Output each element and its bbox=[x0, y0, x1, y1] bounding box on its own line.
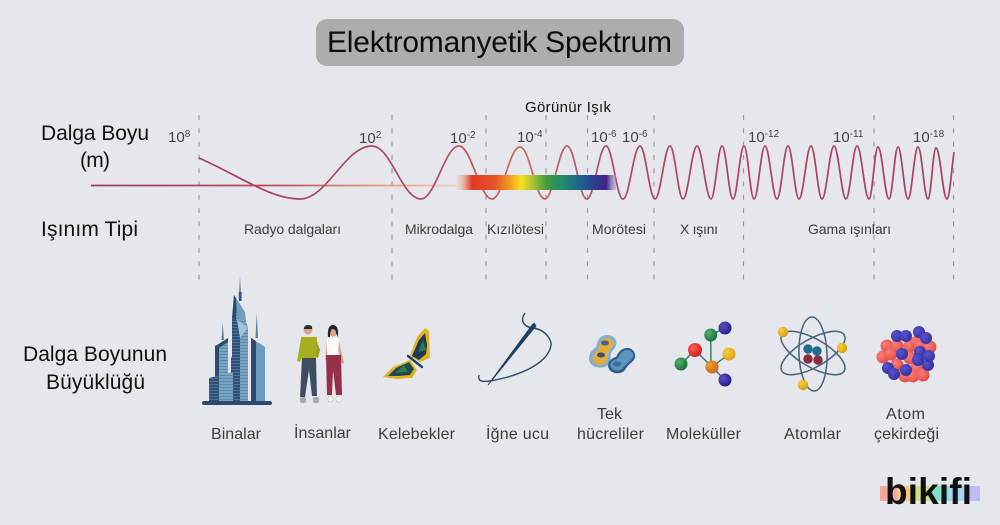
wavelength scale labels: -4 bbox=[534, 129, 543, 140]
size category labels: İğne ucu bbox=[486, 424, 549, 443]
wavelength scale labels: 10 bbox=[359, 130, 376, 147]
wavelength scale labels: 2 bbox=[376, 130, 382, 141]
wavelength scale labels: 10 bbox=[748, 129, 765, 146]
icon: people bbox=[297, 325, 344, 403]
title bbox=[316, 19, 684, 66]
wavelength scale labels bbox=[168, 129, 945, 147]
radiation type labels bbox=[244, 221, 891, 237]
logo: bikifi: bikifi bbox=[885, 471, 972, 512]
wavelength scale labels: 10 bbox=[833, 129, 850, 146]
heading: Dalga Boyunun Büyüklüğü: Büyüklüğü bbox=[46, 371, 145, 394]
wavelength scale labels: -2 bbox=[467, 130, 476, 141]
wavelength scale labels: -11 bbox=[850, 129, 864, 140]
size category labels bbox=[211, 406, 939, 443]
axis line bbox=[91, 184, 456, 186]
visible spectrum band bbox=[456, 175, 616, 190]
wavelength scale labels: 10 bbox=[517, 129, 534, 146]
radiation type labels: Morötesi bbox=[592, 221, 646, 237]
radiation type labels: Kızılötesi bbox=[487, 221, 544, 237]
radiation type labels: X ışını bbox=[680, 221, 718, 237]
icon: atom bbox=[775, 317, 851, 391]
wavelength scale labels: 10 bbox=[591, 129, 608, 146]
wavelength scale labels: 10 bbox=[450, 130, 467, 147]
wavelength scale labels: 8 bbox=[185, 129, 191, 140]
wavelength scale labels: -6 bbox=[608, 129, 617, 140]
wavelength scale labels: -6 bbox=[639, 129, 648, 140]
size category labels: çekirdeği bbox=[874, 426, 939, 443]
heading: Dalga Boyu (m): (m) bbox=[80, 149, 110, 172]
heading: Işınım Tipi: Işınım Tipi bbox=[41, 218, 138, 241]
size category labels: Atom bbox=[886, 406, 925, 423]
radiation type labels: Mikrodalga bbox=[405, 221, 473, 237]
heading: Dalga Boyu (m) bbox=[41, 122, 149, 172]
icon: single-cell organisms bbox=[589, 335, 635, 373]
title: Elektromanyetik Spektrum bbox=[327, 26, 672, 59]
icon: atomic nucleus bbox=[876, 326, 936, 382]
heading: Dalga Boyunun Büyüklüğü bbox=[23, 343, 167, 394]
heading: Dalga Boyunun Büyüklüğü: Dalga Boyunun bbox=[23, 343, 167, 366]
size category labels: Atomlar bbox=[784, 426, 842, 443]
visible light label: Görünür Işık bbox=[525, 99, 612, 116]
icon: needle and thread bbox=[479, 313, 551, 385]
wavelength scale labels: -12 bbox=[765, 129, 780, 140]
icon: butterfly bbox=[383, 328, 430, 379]
wavelength scale labels: 10 bbox=[622, 129, 639, 146]
electromagnetic wave bbox=[199, 146, 954, 199]
size category labels: hücreliler bbox=[577, 426, 645, 443]
wavelength scale labels: 10 bbox=[168, 129, 185, 146]
size category labels: İnsanlar bbox=[294, 423, 352, 442]
wavelength scale labels: -18 bbox=[930, 129, 945, 140]
size category labels: Moleküller bbox=[666, 426, 742, 443]
radiation type labels: Radyo dalgaları bbox=[244, 221, 341, 237]
size category labels: Tek bbox=[597, 406, 623, 423]
wavelength scale labels: 10 bbox=[913, 129, 930, 146]
size category labels: Binalar bbox=[211, 426, 262, 443]
icon: buildings bbox=[202, 276, 272, 405]
size category labels: Kelebekler bbox=[378, 426, 456, 443]
radiation type labels: Gama ışınları bbox=[808, 221, 891, 237]
heading: Dalga Boyu (m): Dalga Boyu bbox=[41, 122, 149, 145]
icon: molecule bbox=[674, 322, 736, 386]
